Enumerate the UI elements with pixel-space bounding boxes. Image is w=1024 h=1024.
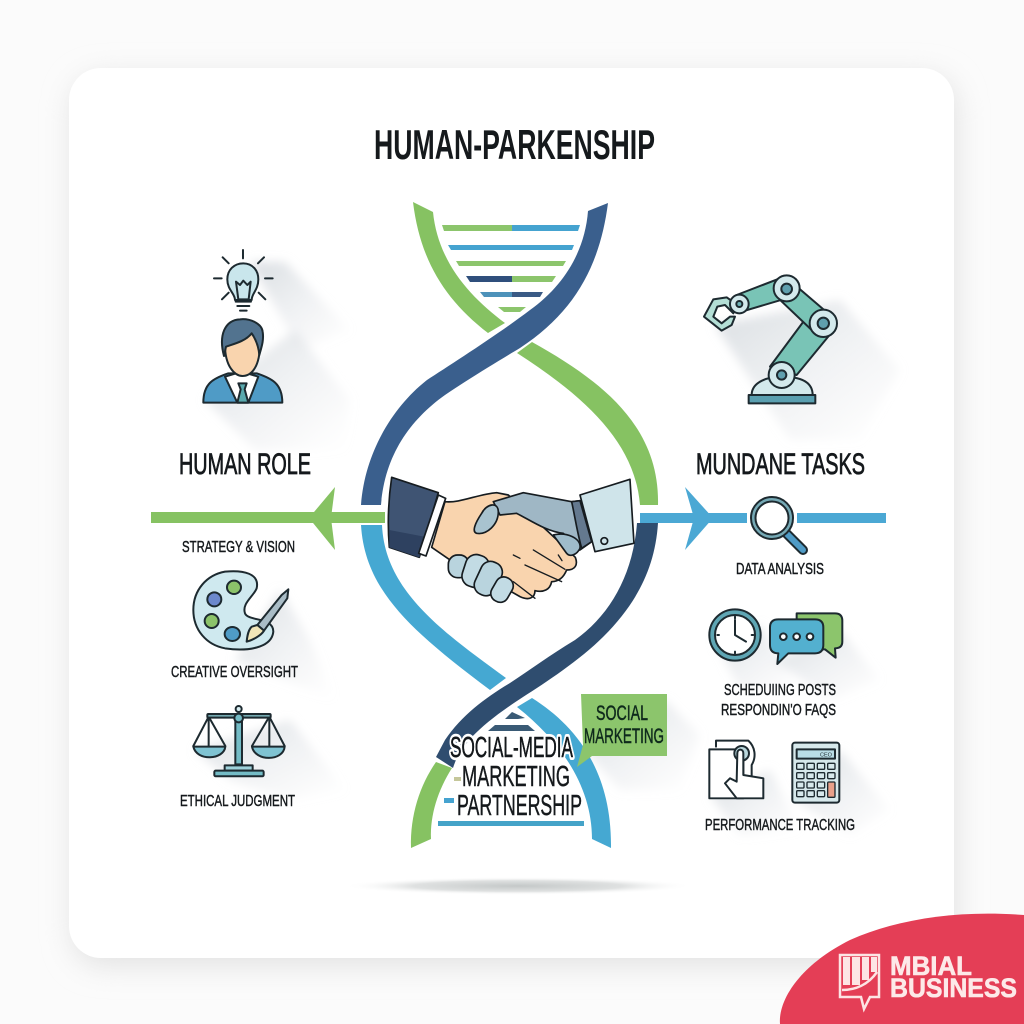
icon shadows [195, 262, 900, 835]
icon: calculator [792, 743, 839, 803]
logo mark [840, 955, 879, 1009]
DNA helix [361, 202, 658, 848]
arrow: human role (left, green) [151, 487, 385, 550]
label: scheduling posts and responding to FAQs: RESPONDIN'O FAQS [721, 702, 836, 719]
strand: green middle [517, 342, 658, 505]
icon: handshake [388, 477, 634, 605]
label: ethical judgment: ETHICAL JUDGMENT [180, 793, 295, 810]
label: scheduling posts and responding to FAQs [721, 682, 836, 719]
strand: green lower [411, 762, 452, 848]
bottom rungs [438, 712, 584, 826]
ground shadow [343, 877, 693, 895]
bulb [214, 250, 273, 311]
icon: robot arm [704, 275, 837, 403]
panel: main card [69, 68, 954, 958]
heading: mundane tasks: MUNDANE TASKS [696, 448, 865, 481]
badge: mbial business logo: BUSINESS [890, 973, 1017, 1003]
label: performance tracking: PERFORMANCE TRACKING [705, 817, 855, 834]
robot fingers [448, 555, 469, 578]
clock [709, 609, 761, 661]
label: scheduling posts and responding to FAQs: SCHEDUIING POSTS [724, 682, 836, 699]
title: HUMAN-PARKENSHIP [374, 121, 655, 168]
strand: navy upper [361, 203, 608, 505]
callout: social marketing [577, 694, 667, 767]
icon: scales of justice [193, 706, 285, 776]
icon: magnifying glass [751, 497, 803, 550]
center label: social media marketing partnership: PARTNERSHIP [457, 790, 582, 822]
label: creative oversight: CREATIVE OVERSIGHT [171, 664, 298, 681]
icon: palette and brush [193, 571, 288, 649]
center label: social media marketing partnership [450, 732, 582, 822]
strand: navy lower [436, 523, 658, 768]
callout: social marketing: SOCIAL [596, 702, 648, 725]
person [203, 373, 282, 403]
callout: social marketing: MARKETING [584, 725, 664, 748]
badge: mbial business logo [780, 914, 1024, 1024]
center label: social media marketing partnership: SOCIAL-MEDIA [450, 732, 573, 764]
strand: blue lower left [361, 525, 506, 690]
label: data analysis: DATA ANALYSIS [736, 561, 824, 578]
bubbles [797, 613, 842, 658]
icon: clock and chat bubbles [709, 609, 842, 664]
strand: blue lower right [517, 698, 611, 848]
heading: human role: HUMAN ROLE [179, 448, 311, 481]
badge: mbial business logo: MBIAL [890, 951, 972, 981]
right cuff [580, 479, 634, 552]
icon: calculator: CEO [820, 753, 833, 759]
center label: social media marketing partnership: MARKETING [462, 761, 570, 793]
left cuff [419, 495, 446, 556]
arrow: mundane tasks (right, blue) [640, 487, 886, 550]
icon: document with pointing hand [709, 741, 763, 798]
left sleeve [388, 477, 438, 557]
center label: social media marketing partnership: SOCIAL-MEDIA [450, 732, 573, 764]
robot hand [493, 493, 592, 550]
top rungs [442, 225, 580, 312]
strand: green upper [413, 202, 505, 333]
label: strategy and vision: STRATEGY & VISION [182, 539, 295, 556]
human hand [432, 493, 576, 599]
icon: light bulb and person [203, 250, 282, 403]
